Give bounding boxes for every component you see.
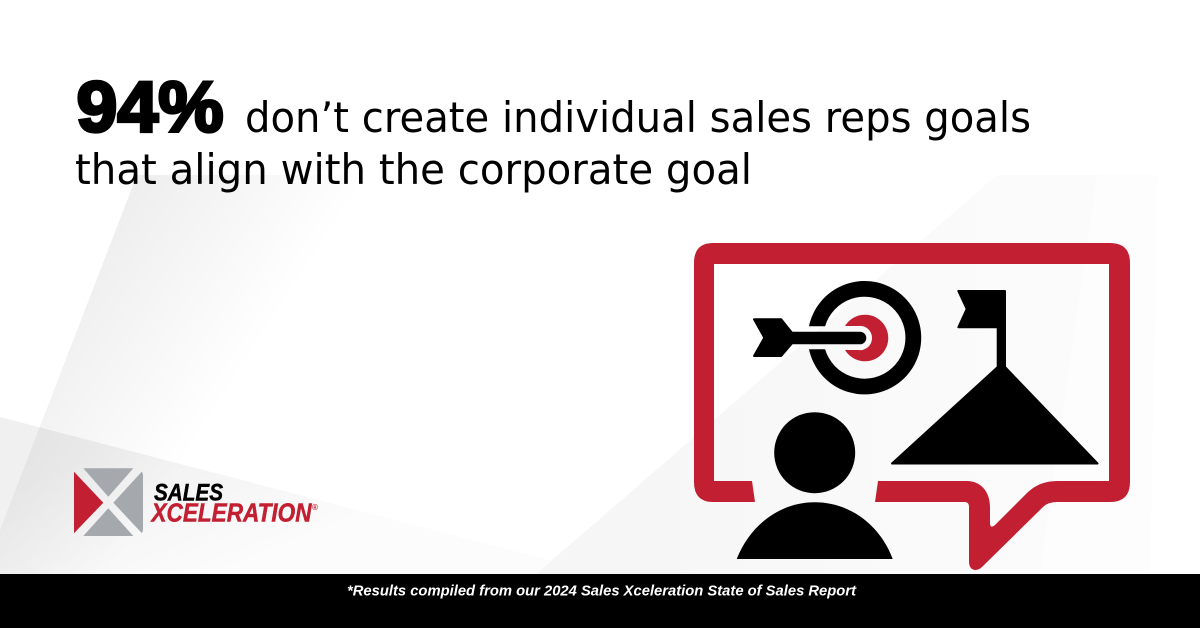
headline line 2: that align with the corporate goal <box>75 145 752 194</box>
target red bullseye <box>845 315 888 361</box>
footer bar <box>0 574 1200 628</box>
logo wordmark: SALES: SALES <box>154 480 223 506</box>
headline statistic: 94%: 94% <box>76 68 224 148</box>
target outer ring <box>809 281 921 394</box>
icon: target with arrow <box>754 281 921 394</box>
background: right outer facet <box>1040 175 1158 574</box>
background: right diagonal facet <box>536 175 1097 574</box>
logo mark <box>74 468 143 536</box>
icon: person <box>737 412 893 559</box>
background: lower-left grey facet <box>0 417 590 574</box>
headline line 1: don’t create individual sales reps goals <box>245 93 1031 142</box>
logo: Sales Xceleration <box>74 468 318 536</box>
icon: mountain with flag <box>892 291 1098 464</box>
logo registered mark: ® <box>312 503 318 512</box>
logo wordmark: XCELERATION: XCELERATION <box>150 500 312 528</box>
background: upper-left light grey facet <box>0 175 420 574</box>
arrow <box>754 319 865 356</box>
footer source note: *Results compiled from our 2024 Sales Xceleration State of Sales Report <box>347 584 857 600</box>
headline <box>75 68 1031 194</box>
person shoulders <box>737 502 893 559</box>
person head <box>774 412 855 493</box>
icon: red speech bubble <box>694 243 1130 570</box>
